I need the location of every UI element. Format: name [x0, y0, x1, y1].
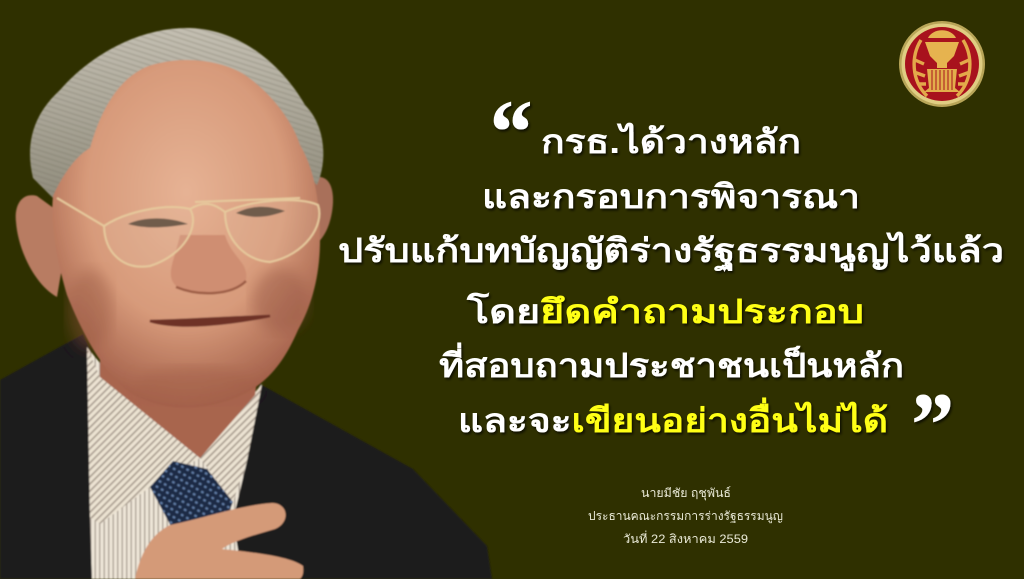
line 4: โดย ยึดคำถามประกอบ — [466, 292, 864, 330]
cheek shading — [252, 268, 308, 332]
quote text — [338, 122, 1004, 439]
left vine ornament — [914, 40, 927, 96]
mouth — [150, 316, 270, 325]
line 1: กรธ.ได้วางหลัก — [541, 122, 801, 160]
shirt — [87, 347, 260, 579]
date: วันที่ 22 สิงหาคม 2559 — [623, 530, 748, 546]
name: นายมีชัย ฤชุพันธ์ — [641, 486, 731, 501]
emblem: parliament seal — [899, 21, 985, 107]
jacket — [0, 334, 492, 579]
necktie — [150, 461, 233, 530]
shirt collar — [87, 347, 262, 524]
nose — [171, 235, 246, 292]
quote mark open: “ — [485, 81, 531, 183]
pedestal — [924, 69, 960, 92]
face — [52, 60, 320, 408]
neck — [100, 340, 262, 458]
pointing hand — [135, 503, 303, 579]
line 6: และจะ เขียนอย่างอื่นไม่ได้ — [458, 397, 888, 439]
quote mark close: ” — [906, 374, 952, 476]
line 2: และกรอบการพิจารณา — [482, 178, 860, 215]
rays — [928, 30, 956, 38]
line 5: ที่สอบถามประชาชนเป็นหลัก — [439, 342, 904, 384]
attribution — [588, 486, 783, 546]
right vine ornament — [957, 40, 970, 96]
left ear — [16, 195, 70, 297]
right ear — [305, 177, 333, 246]
hair — [30, 28, 323, 210]
role: ประธานคณะกรรมการร่างรัฐธรรมนูญ — [588, 509, 783, 524]
bowl — [925, 42, 959, 68]
portrait photo — [0, 28, 492, 579]
line 3: ปรับแก้บทบัญญัติร่างรัฐธรรมนูญไว้แล้ว — [338, 231, 1004, 272]
eyes — [128, 207, 285, 227]
glasses — [57, 198, 319, 267]
